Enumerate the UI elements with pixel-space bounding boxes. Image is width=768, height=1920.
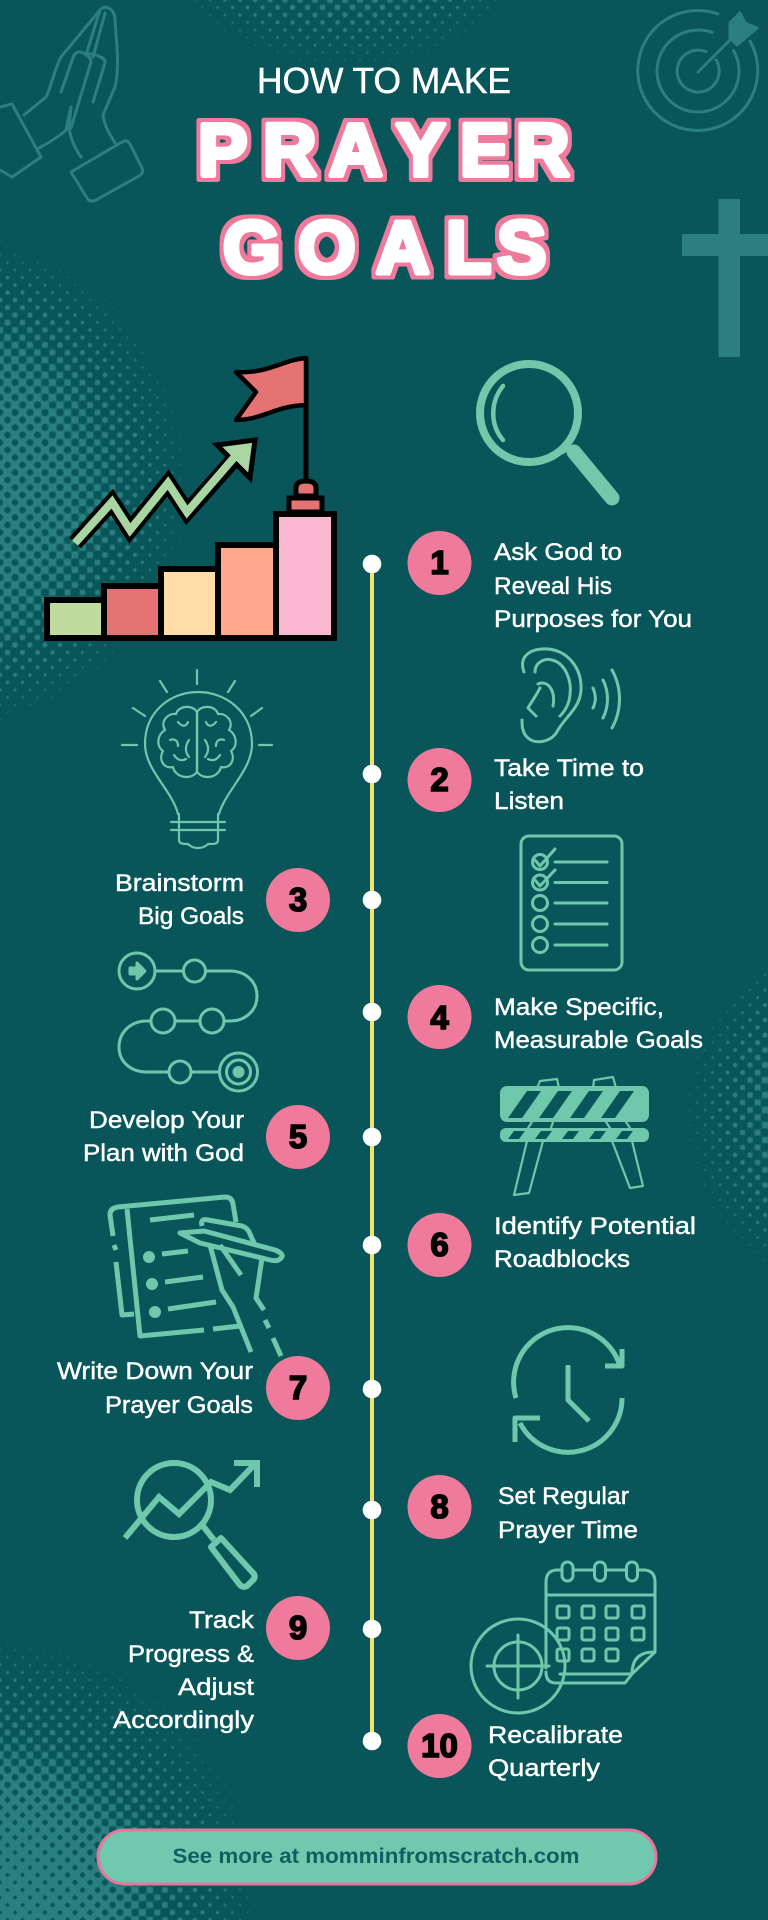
step 1 — [408, 531, 692, 633]
step 3 — [115, 868, 330, 932]
step 10 — [408, 1714, 623, 1782]
call to action pill: See more at momminfromscratch.com — [172, 1844, 580, 1868]
step 2: Listen — [494, 788, 564, 815]
icon: calendar with crosshair — [471, 1562, 655, 1713]
icon: light bulb with brain — [122, 670, 272, 848]
step 2: Take Time to — [494, 755, 644, 782]
step 9: Accordingly — [113, 1707, 254, 1734]
step 10: 10 — [421, 1727, 458, 1764]
step 5: 5 — [289, 1118, 307, 1155]
title — [198, 60, 569, 289]
step 1: Ask God to — [494, 539, 622, 566]
step 8: Prayer Time — [498, 1517, 638, 1544]
step 7: Prayer Goals — [105, 1392, 253, 1419]
icon: target with arrow — [638, 10, 758, 130]
step 10: Quarterly — [488, 1755, 600, 1782]
step 1: Purposes for You — [494, 606, 692, 633]
step 6: 6 — [430, 1226, 449, 1263]
step 7: 7 — [289, 1369, 307, 1406]
timeline — [363, 555, 381, 1750]
icon: checklist — [521, 836, 622, 970]
step 8: Set Regular — [498, 1483, 629, 1510]
call to action pill — [98, 1830, 656, 1884]
step 10: Recalibrate — [488, 1722, 623, 1749]
step 9: 9 — [289, 1609, 307, 1646]
icon: route path — [119, 953, 258, 1091]
step 5: Develop Your — [89, 1107, 244, 1134]
icon: hand writing on a list — [110, 1197, 282, 1356]
icon: magnifier with rising trend — [125, 1463, 257, 1587]
step 4: Make Specific, — [494, 994, 664, 1021]
step 5 — [83, 1105, 330, 1169]
step 8 — [408, 1475, 638, 1544]
heading: goals: GOALS — [223, 206, 546, 289]
icon: clock with circular arrows — [514, 1328, 622, 1452]
icon: cross — [682, 199, 768, 357]
step 3: Big Goals — [138, 903, 244, 930]
step 1: Reveal His — [494, 573, 612, 600]
step 4 — [408, 985, 703, 1054]
icon: roadblock barricade — [500, 1077, 649, 1195]
step 9: Track — [189, 1607, 255, 1634]
heading: prayer: PRAYER — [198, 108, 569, 192]
icon: ear with sound waves — [522, 649, 620, 742]
step 6 — [408, 1213, 696, 1277]
step 3: Brainstorm — [115, 870, 244, 897]
step 8: 8 — [430, 1488, 449, 1525]
step 6: Identify Potential — [494, 1213, 696, 1240]
step 9: Adjust — [178, 1674, 254, 1701]
step 2 — [408, 748, 644, 815]
step 3: 3 — [289, 881, 307, 918]
step 7 — [57, 1356, 330, 1420]
step 9 — [113, 1596, 330, 1734]
step 2: 2 — [430, 761, 449, 798]
subtitle: HOW TO MAKE — [257, 60, 511, 101]
step 4: 4 — [430, 999, 449, 1036]
step 9: Progress & — [128, 1641, 254, 1668]
icon: bar chart with flag and rising arrow — [47, 358, 334, 638]
step 6: Roadblocks — [494, 1246, 630, 1273]
icon: magnifying glass — [480, 364, 612, 498]
step 7: Write Down Your — [57, 1358, 253, 1385]
step 1: 1 — [430, 544, 449, 581]
icon: praying hands — [0, 7, 143, 201]
step 5: Plan with God — [83, 1140, 244, 1167]
step 4: Measurable Goals — [494, 1027, 703, 1054]
